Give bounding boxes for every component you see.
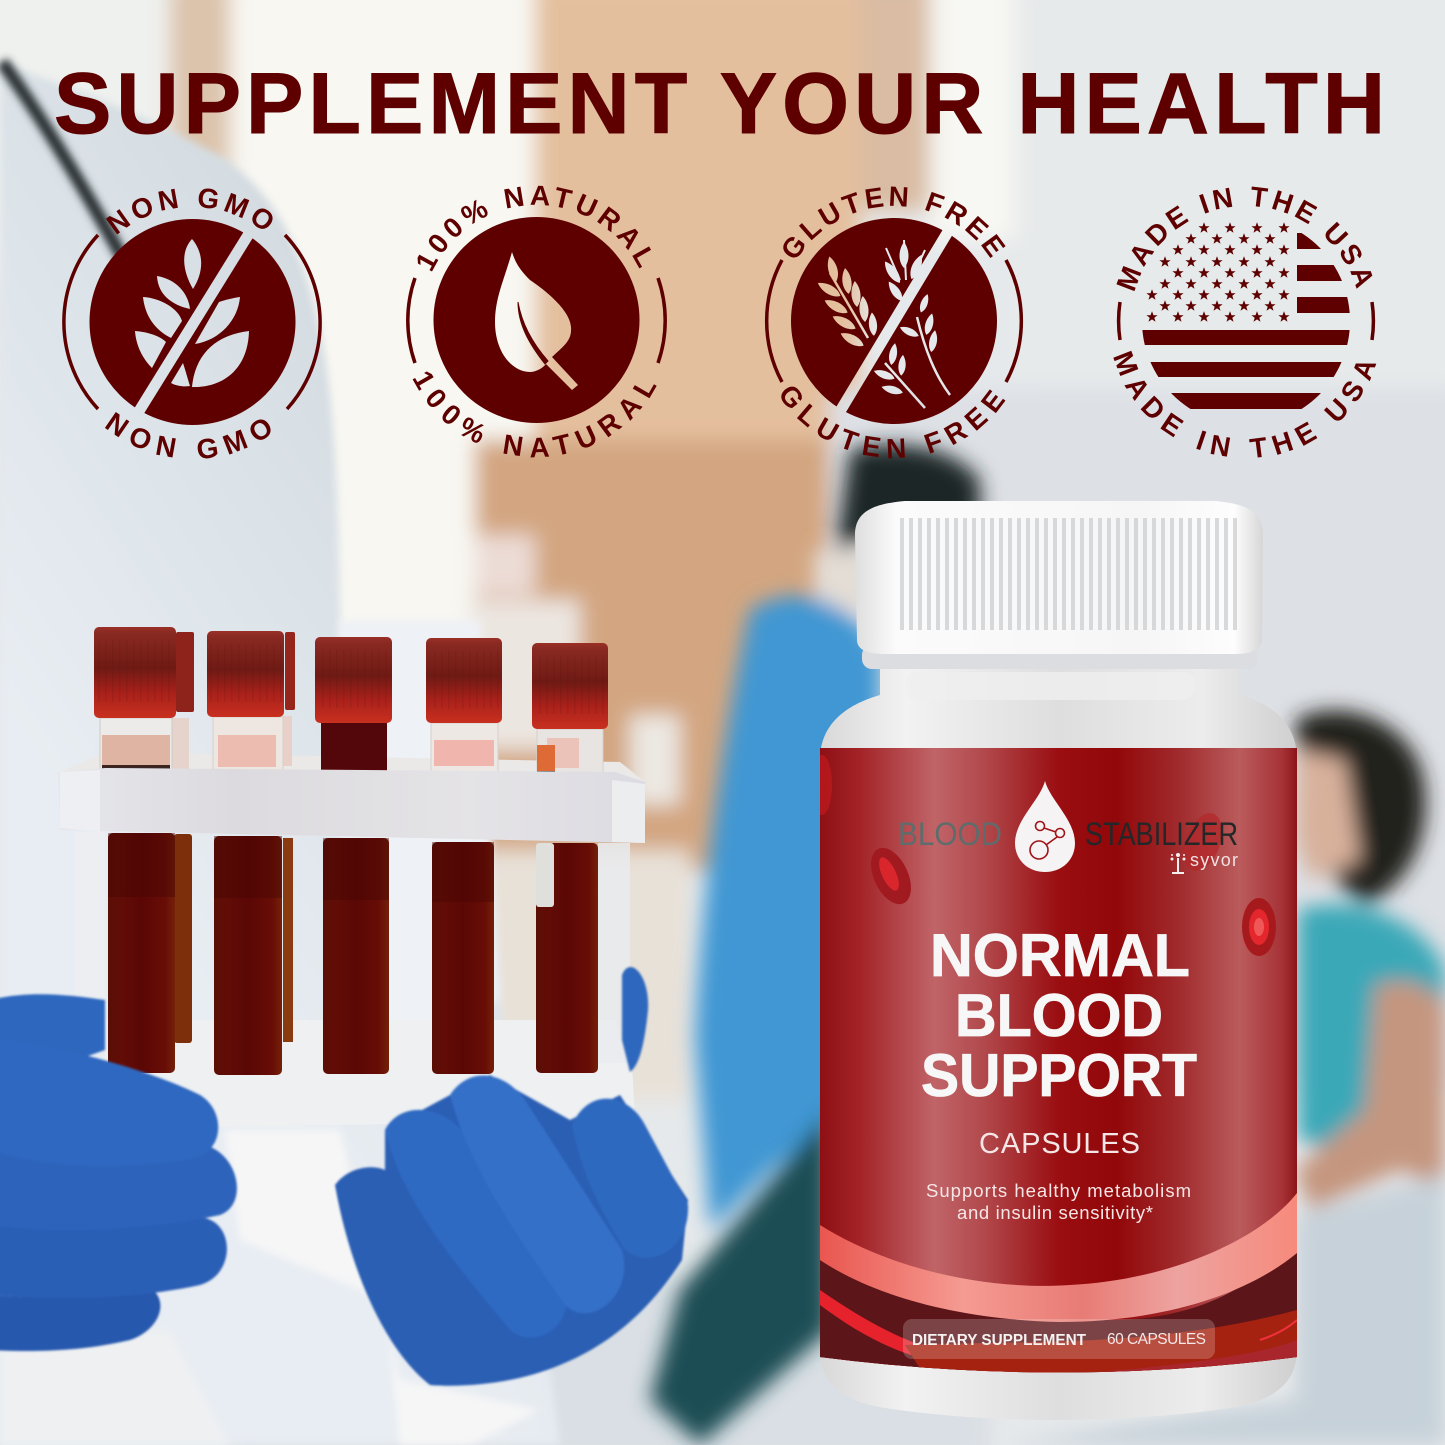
label [812,748,1297,1400]
rack left leg [75,832,105,1052]
badge: gluten free [764,186,1024,458]
neck ring [862,645,1258,669]
badge text bottom: GLUTEN FREE [781,386,1006,458]
badge: made in the USA [1113,186,1376,458]
product badge strip [903,1319,1215,1359]
background: nurse in blue scrubs [650,444,980,1445]
rack right leg [598,843,630,1063]
brand word STABILIZER: STABILIZER [1085,816,1238,852]
product description: Supports healthy metabolism [926,1180,1191,1201]
badge text bottom: MADE IN THE USA [1113,350,1376,458]
doctor in white coat [0,62,560,1445]
product name: SUPPORT [921,1042,1197,1109]
supplement bottle [812,501,1297,1420]
gloved right hand [335,967,688,1386]
brand word BLOOD: BLOOD [898,816,1002,852]
test tube rack with blood samples [58,627,645,1127]
logo: drop with molecule [1015,781,1075,872]
icon: leaf [434,217,640,423]
icon: crossed-out plant [90,219,296,425]
blood cell decorations [812,755,1276,956]
title: SUPPLEMENT YOUR HEALTH [54,56,1385,152]
badge ring arcs [1119,302,1373,340]
back tube samples [172,632,295,1043]
badge text bottom: 100% NATURAL [412,372,657,458]
lower swoosh bands [820,1193,1297,1372]
stethoscope tube [2,62,125,262]
product description [926,1180,1191,1223]
badge: non GMO [62,188,322,458]
bottle body [820,668,1297,1420]
capsule count: 60 CAPSULES [1107,1331,1206,1348]
rack back plate [60,752,645,782]
tube 5 [532,643,608,1073]
tube 1 [94,627,176,1073]
product name: BLOOD [955,982,1163,1049]
rack top plate [58,768,645,843]
badge ring arcs [767,260,1021,382]
badge: 100% natural [406,186,667,458]
bottle cap [855,501,1263,654]
badge ring arcs [408,278,665,363]
icon: American flag circle [1130,222,1360,409]
product name: NORMAL [930,922,1190,989]
product form: CAPSULES [979,1128,1140,1160]
dietary supplement text: DIETARY SUPPLEMENT [912,1332,1087,1349]
badge text top: MADE IN THE USA [1116,186,1372,292]
badge text bottom: NON GMO [105,412,271,458]
badge text top: GLUTEN FREE [783,186,1006,258]
product description: and insulin sensitivity* [957,1202,1153,1223]
rack bottom plate [105,1020,635,1127]
tube 2 [207,631,284,1075]
background: patient in bed [1000,711,1445,1445]
badge text top: 100% NATURAL [418,186,651,272]
brand word syvor: syvor [1190,850,1238,870]
badge ring arcs [64,235,320,409]
product name [921,922,1197,1109]
tube 3 [315,637,392,1074]
gloved left hand [0,994,237,1351]
brand icon: tree [1170,853,1186,874]
neck highlight [905,672,1195,700]
badge text top: NON GMO [106,188,273,234]
icon: crossed-out wheat [791,218,997,424]
tube 4 [426,638,502,1074]
